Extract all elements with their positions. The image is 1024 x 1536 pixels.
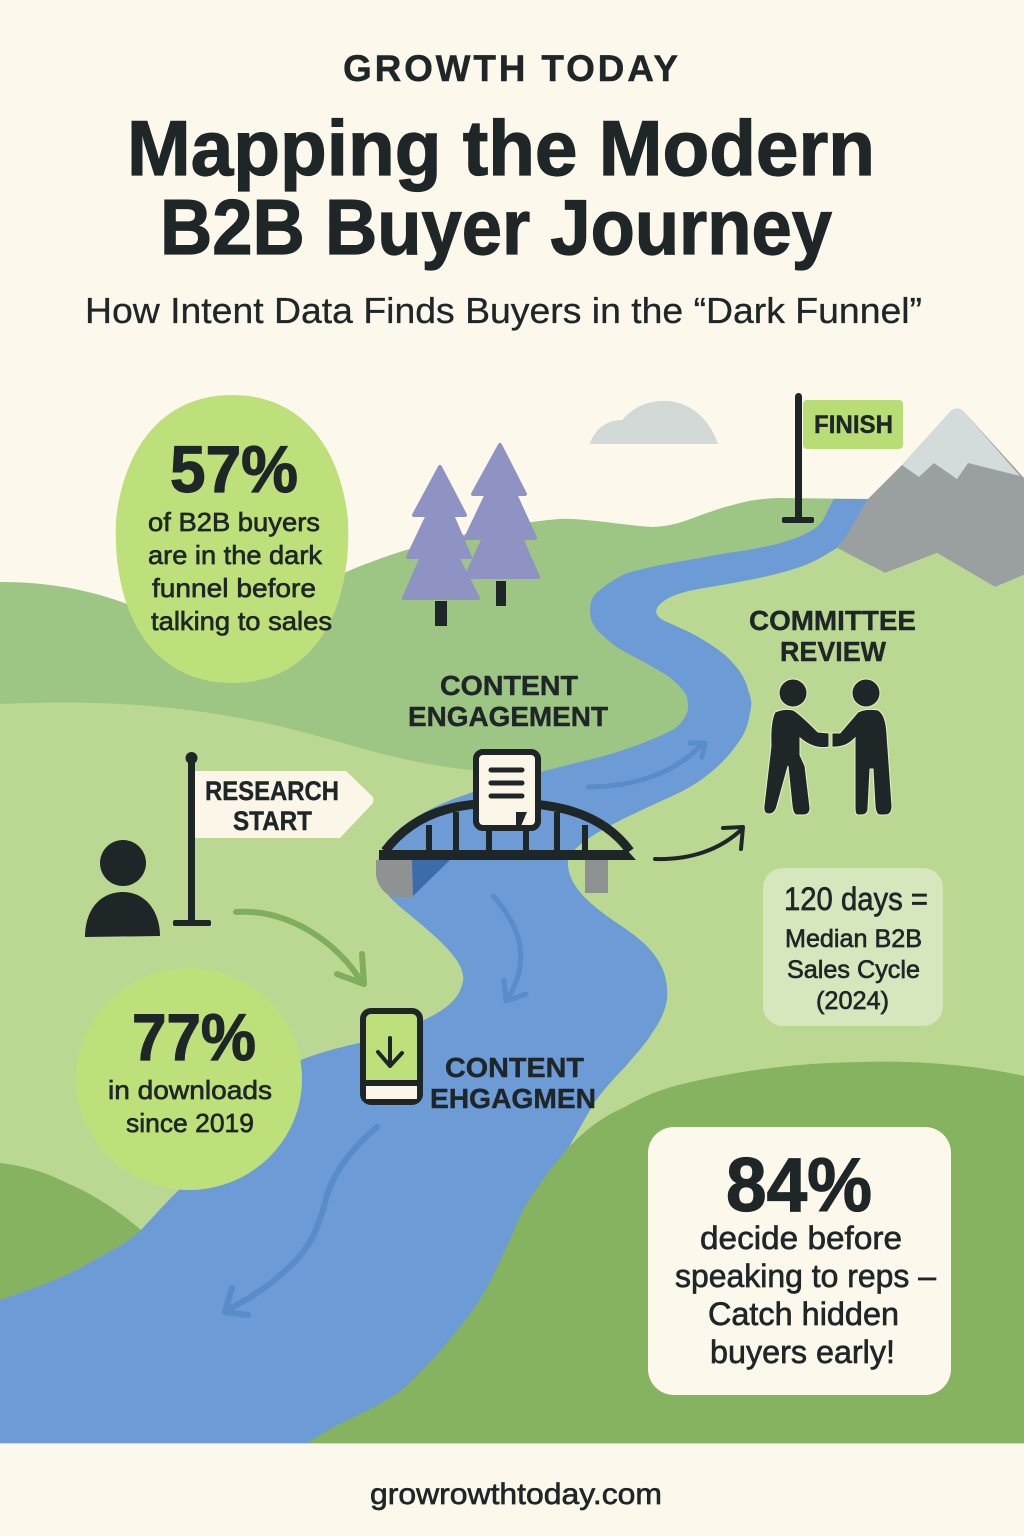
footer url: growrowthtoday.com — [370, 1478, 662, 1511]
icon: document — [476, 752, 538, 828]
bubble: 57% stat: of B2B buyers — [148, 507, 320, 537]
bubble: 77% stat: in downloads — [108, 1075, 272, 1105]
label: content engagement top: ENGAGEMENT — [408, 701, 608, 732]
callout: 120 days: Median B2B — [785, 925, 922, 953]
research start flag: RESEARCH — [205, 776, 339, 806]
callout: 84% stat: 84% — [726, 1143, 872, 1228]
arch and hangers — [385, 803, 630, 852]
callout: 84% stat: decide before — [700, 1220, 902, 1256]
arrow: river middle — [493, 896, 526, 1001]
publication name: GROWTH TODAY — [343, 48, 678, 89]
bubble: 57% stat — [116, 395, 348, 683]
label: content engagement top — [408, 670, 608, 732]
icon: person — [85, 840, 160, 937]
bridge — [376, 752, 636, 897]
left meadow — [0, 703, 620, 1300]
callout: 84% stat — [648, 1127, 951, 1395]
river — [0, 499, 868, 1443]
bubble: 57% stat: funnel before — [152, 573, 316, 603]
finish flag — [782, 393, 903, 523]
research start flag: START — [233, 806, 312, 836]
bubble: 57% stat: are in the dark — [148, 540, 323, 570]
right tree — [466, 445, 538, 606]
bubble: 77% stat — [76, 968, 302, 1190]
title: B2B Buyer Journey — [160, 183, 832, 271]
subtitle: How Intent Data Finds Buyers in the “Dark Funnel” — [85, 290, 922, 331]
callout: 84% stat: Catch hidden — [708, 1296, 899, 1332]
label: committee review — [749, 605, 916, 667]
cloud — [590, 401, 718, 444]
bubble: 77% stat: since 2019 — [126, 1108, 254, 1138]
finish flag: FINISH — [814, 411, 893, 439]
label: content engagement lower: EHGAGMEN — [430, 1083, 596, 1114]
arrow: green — [236, 912, 364, 984]
bubble: 77% stat: 77% — [132, 1000, 256, 1074]
title — [127, 104, 875, 271]
landscape — [0, 408, 1024, 1443]
callout: 120 days: 120 days = — [784, 881, 928, 917]
callout: 120 days: Sales Cycle — [787, 956, 920, 984]
lower right hill — [308, 1062, 1024, 1443]
icon: handshake people — [764, 679, 892, 815]
icon: phone download — [363, 1011, 420, 1102]
label: committee review: COMMITTEE — [749, 605, 916, 636]
piers — [376, 860, 413, 897]
label: committee review: REVIEW — [780, 636, 887, 667]
arrow: to committee — [655, 827, 743, 859]
mountain — [838, 408, 1024, 587]
callout: 84% stat: speaking to reps – — [675, 1258, 936, 1294]
label: content engagement top: CONTENT — [440, 670, 578, 701]
label: content engagement lower: CONTENT — [445, 1052, 584, 1083]
label: content engagement lower — [430, 1052, 596, 1114]
left tree — [404, 467, 478, 626]
callout: 120 days — [763, 868, 943, 1026]
header — [85, 48, 922, 331]
callout: 84% stat: buyers early! — [710, 1334, 895, 1370]
bubble: 57% stat: 57% — [170, 432, 298, 506]
research start flag — [173, 752, 374, 926]
back hill — [0, 498, 900, 1443]
trees — [404, 445, 538, 626]
right meadow — [540, 548, 1024, 1300]
lower left hill — [0, 1163, 141, 1300]
bubble: 57% stat: talking to sales — [151, 606, 332, 636]
callout: 120 days: (2024) — [816, 987, 889, 1015]
arrow: river lower — [225, 1127, 377, 1315]
title: Mapping the Modern — [127, 104, 875, 192]
arrow: river upper — [588, 743, 705, 787]
footer divider — [0, 1443, 1024, 1444]
